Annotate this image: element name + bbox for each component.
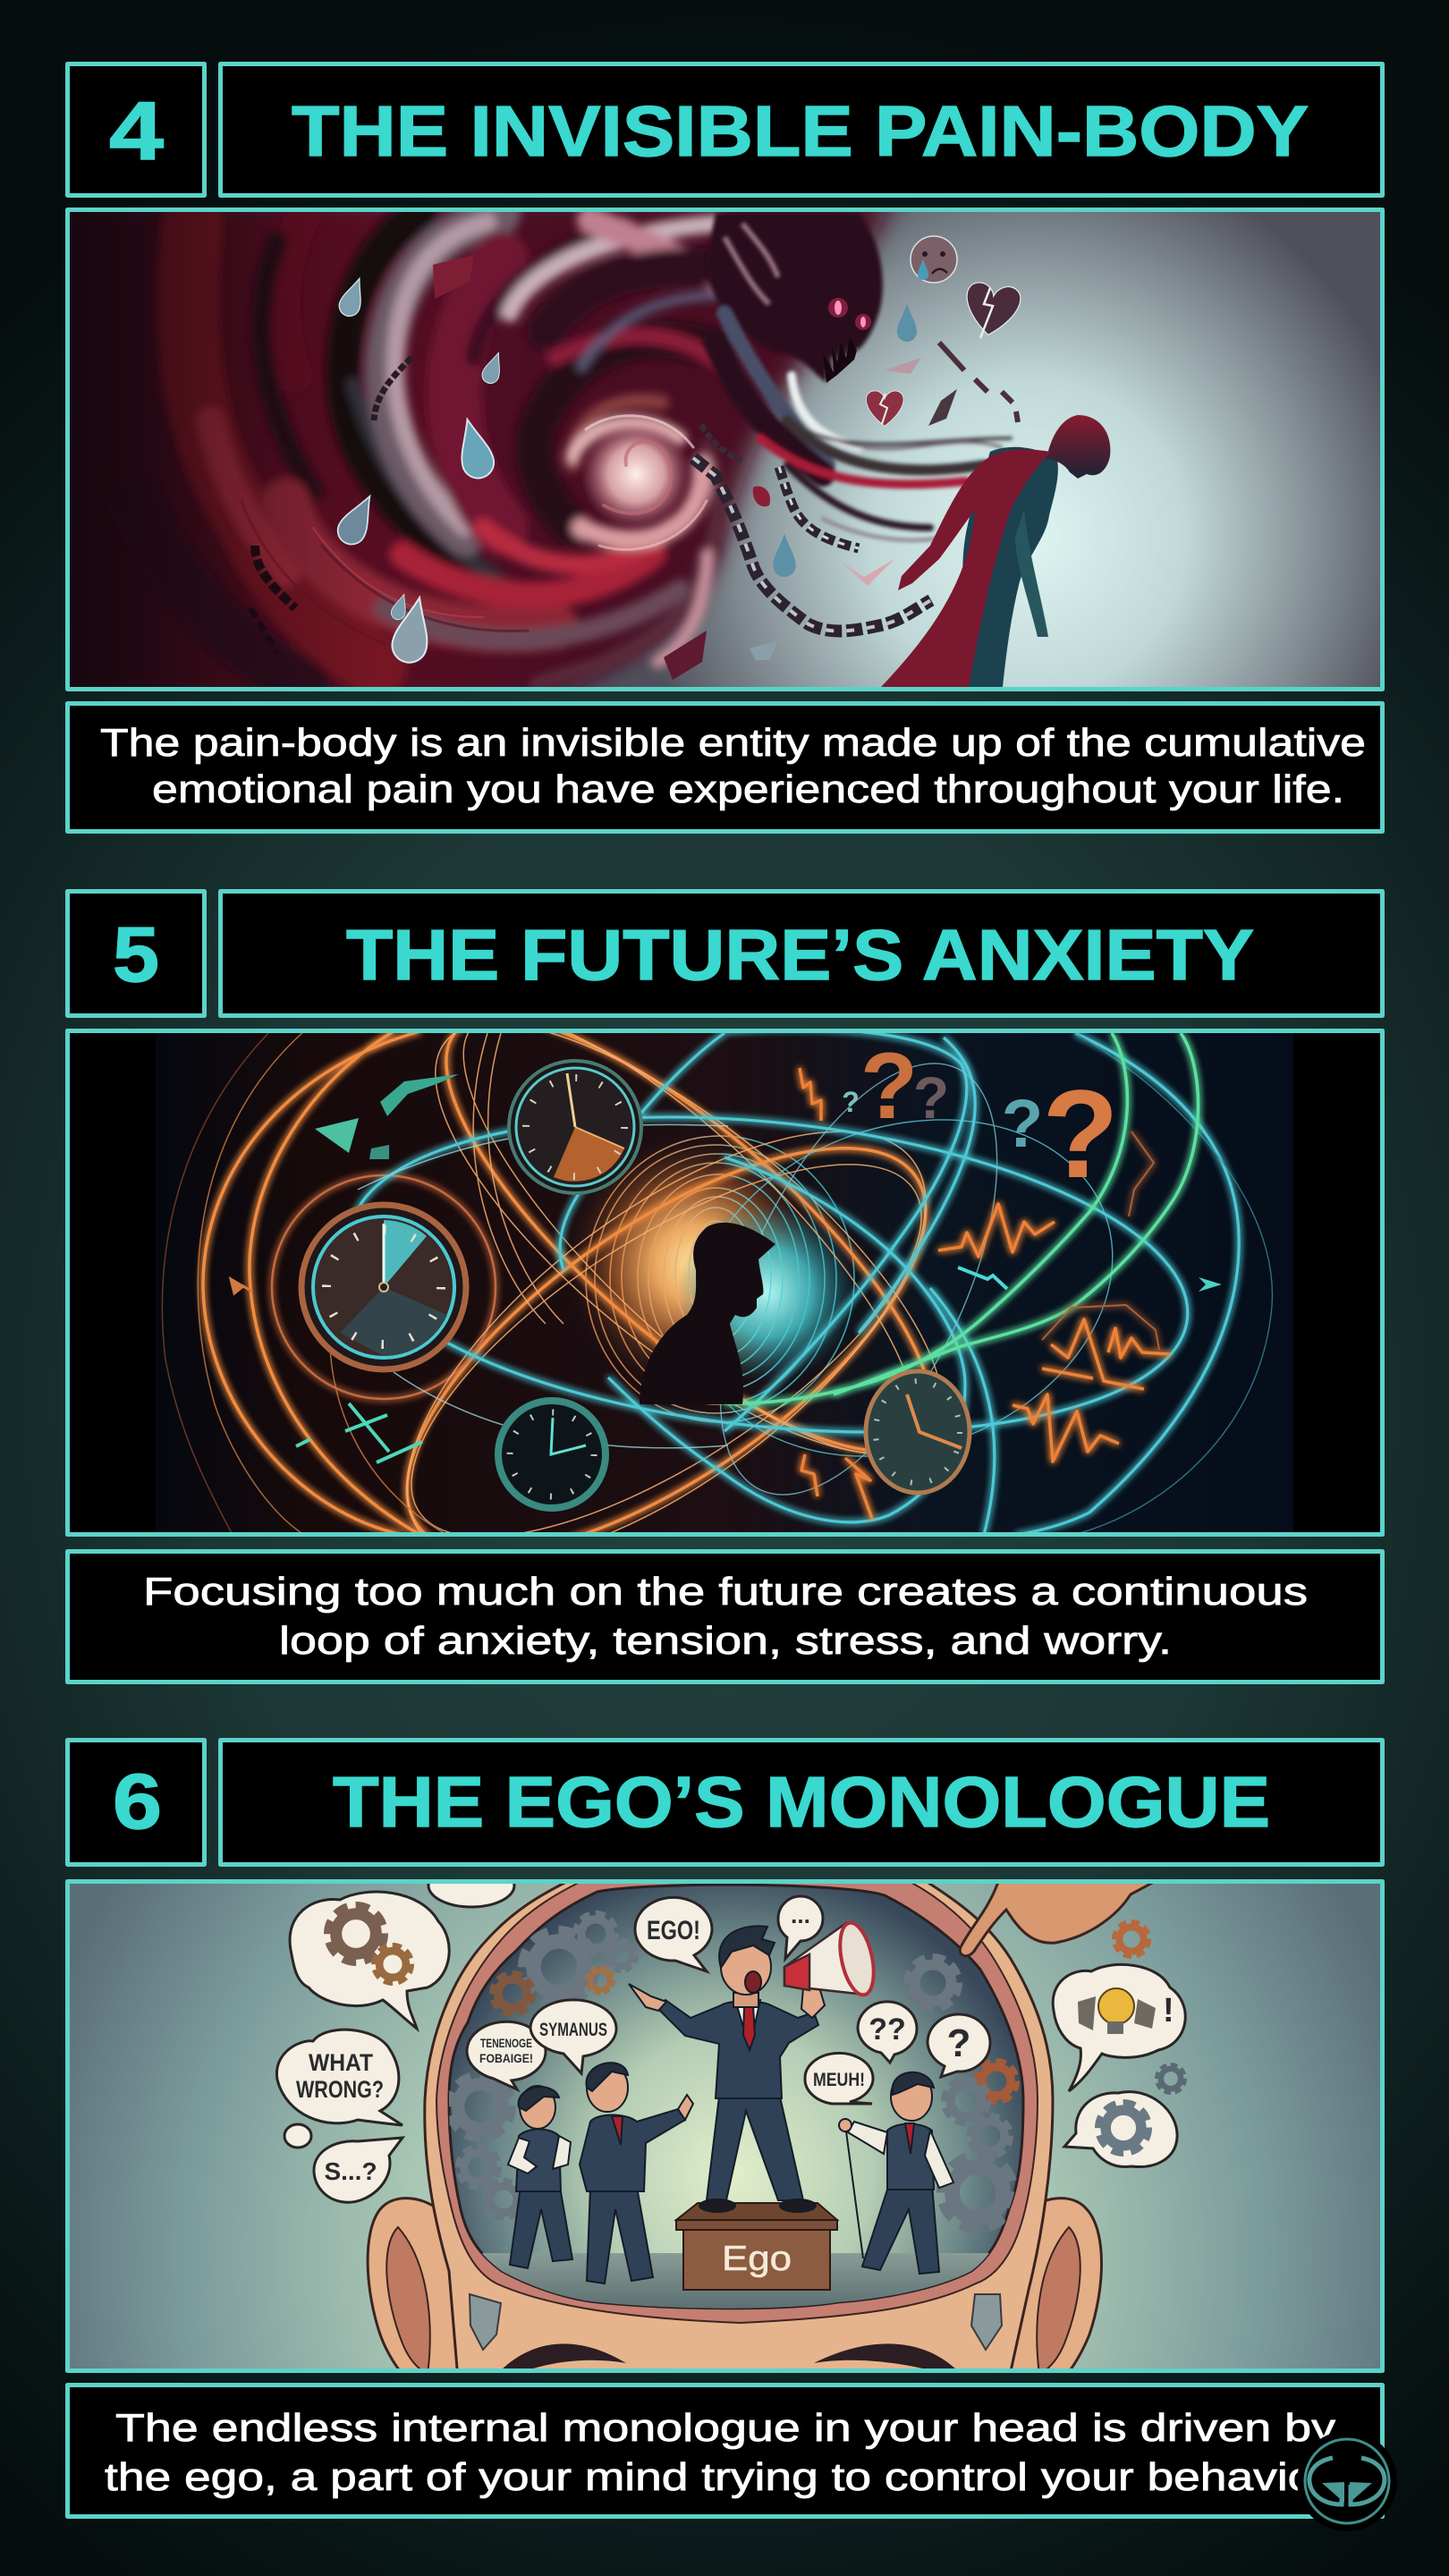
small cloud	[284, 2124, 311, 2148]
heading: the future's anxiety	[220, 891, 1383, 1016]
number box 4	[68, 64, 204, 195]
image frame	[68, 1882, 1383, 2370]
number box 4: 4	[109, 86, 164, 177]
head badges	[470, 2294, 1002, 2350]
small question bubble	[314, 2138, 402, 2202]
clock left	[301, 1205, 466, 1369]
section 6: the ego's monologue	[68, 1741, 1383, 2517]
caption: Focusing too much on the future creates a continuous	[143, 1570, 1308, 1614]
question marks: ?	[1042, 1063, 1119, 1204]
caption: The endless internal monologue in your head is driven by	[115, 2406, 1335, 2450]
question marks	[842, 1034, 1119, 1204]
question marks: ?	[1002, 1086, 1043, 1162]
stage floor	[438, 2253, 1029, 2316]
illustration: swirling pain-body creature and chained person	[54, 197, 1383, 707]
megaphone	[784, 1919, 879, 1998]
logo badge	[1297, 2431, 1397, 2531]
caption: the ego, a part of your mind trying to control your behavior.	[105, 2455, 1341, 2499]
speech bubbles inside the head: ??	[869, 2012, 906, 2046]
glowing orange loops	[195, 1033, 934, 1532]
heading: the invisible pain-body: THE INVISIBLE PAIN-BODY	[292, 91, 1309, 171]
clock bottom right	[866, 1371, 970, 1493]
speech bubbles inside the head: ...	[791, 1902, 810, 1928]
heading: the ego's monologue	[220, 1741, 1383, 1864]
caption: The pain-body is an invisible entity made up of the cumulative	[100, 721, 1366, 765]
question marks: ?	[860, 1034, 918, 1139]
section 4: the invisible pain-body	[54, 64, 1383, 832]
creature	[707, 213, 1011, 540]
glowing teal loops	[335, 1029, 1239, 1535]
forehead eyebrows	[501, 2343, 957, 2370]
speech bubbles inside the head	[467, 1896, 990, 2104]
caption: loop of anxiety, tension, stress, and worry.	[279, 1619, 1172, 1663]
speech bubbles inside the head: FOBAIGE!	[479, 2051, 533, 2065]
small question bubble: S...?	[324, 2157, 377, 2185]
caption: emotional pain you have experienced throughout your life.	[152, 767, 1344, 811]
light bulb thought bubble: !	[1163, 1992, 1174, 2029]
small top bubble	[428, 1864, 514, 1907]
number box 6	[68, 1741, 204, 1864]
person silhouette	[881, 415, 1110, 687]
illustration panel background	[68, 1030, 1383, 1535]
illustration: person in a tunnel surrounded by glowing loops and clocks	[156, 1033, 1293, 1532]
speech bubbles inside the head: TENENOGE	[480, 2036, 532, 2050]
caption	[68, 703, 1383, 832]
central man with megaphone	[629, 1926, 825, 2212]
left man small	[508, 2086, 572, 2268]
floating gears outside head	[1116, 1924, 1183, 2091]
caption	[68, 1551, 1383, 1682]
chains	[250, 358, 931, 653]
what wrong bubble	[276, 2029, 402, 2125]
heading: the future's anxiety: THE FUTURE’S ANXIETY	[346, 915, 1254, 995]
number box 5	[68, 891, 204, 1016]
speech bubbles inside the head: ?	[947, 2021, 970, 2065]
sad face emoji	[911, 236, 957, 283]
pointing hand	[960, 1882, 1154, 1956]
gears	[453, 1916, 1014, 2224]
illustration: arguing men inside an open head	[68, 1864, 1383, 2379]
silhouette of a man	[640, 1223, 775, 1404]
speech bubbles inside the head: MEUH!	[813, 2070, 865, 2090]
image frame	[68, 209, 1383, 689]
what wrong bubble: WRONG?	[296, 2076, 384, 2103]
middle left man	[580, 2063, 693, 2284]
dark left vignette	[70, 212, 342, 687]
clock bottom left	[498, 1401, 606, 1508]
tunnel rings	[586, 1136, 854, 1422]
gear thought bubble	[1064, 2092, 1177, 2167]
heading: the invisible pain-body	[220, 64, 1383, 195]
speech bubbles inside the head: SYMANUS	[539, 2020, 607, 2040]
number box 6: 6	[113, 1758, 162, 1845]
caption	[68, 2385, 1383, 2517]
image frame	[68, 1030, 1383, 1535]
what wrong bubble: WHAT	[309, 2049, 373, 2076]
broken hearts and shards	[433, 255, 1022, 680]
question marks: ?	[842, 1086, 860, 1118]
podium labelled Ego	[676, 2203, 837, 2290]
number box 5: 5	[113, 911, 159, 998]
clock top	[509, 1061, 641, 1193]
tear drops	[333, 275, 917, 665]
question marks: ?	[913, 1064, 949, 1131]
section 5: the future's anxiety	[68, 891, 1383, 1682]
glowing green arcs	[724, 1033, 1199, 1403]
thought bubble with gears	[290, 1892, 449, 2029]
ears	[368, 2199, 1101, 2379]
head and skull rim	[425, 1878, 1053, 2379]
zigzag pulses and lightning	[800, 1068, 1170, 1519]
paper and hourglass shapes	[231, 1074, 1222, 1462]
right man	[839, 2072, 953, 2274]
light bulb thought bubble	[1053, 1964, 1185, 2091]
speech bubbles inside the head: EGO!	[647, 1916, 700, 1945]
heading: the ego's monologue: THE EGO’S MONOLOGUE	[333, 1762, 1270, 1842]
podium labelled Ego: Ego	[722, 2240, 792, 2278]
brain window interior	[449, 1885, 1023, 2309]
